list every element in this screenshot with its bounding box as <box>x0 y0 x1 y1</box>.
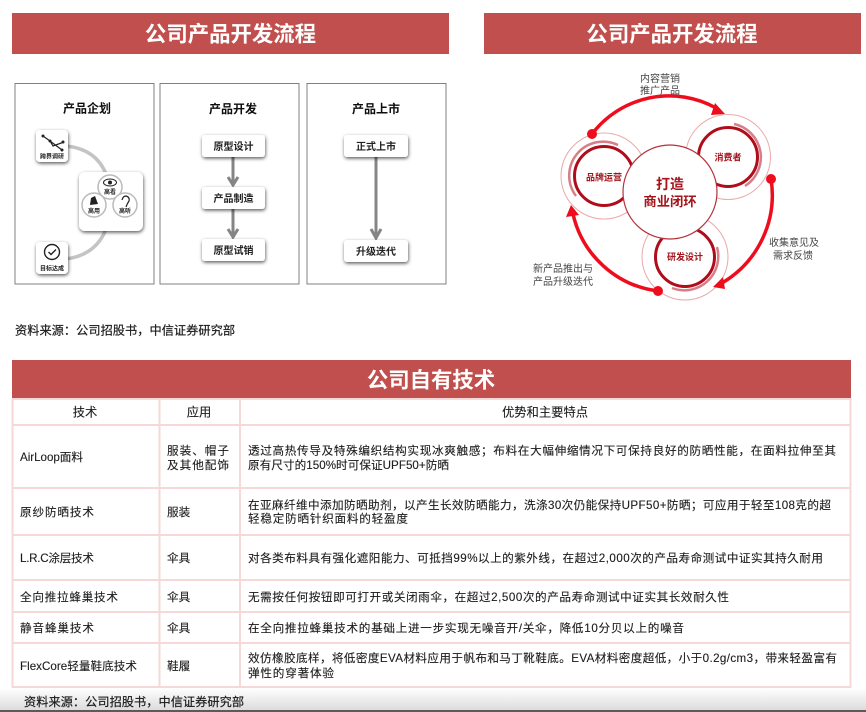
row: 原纱防晒技术: 轻稳定防晒针织面料的轻盈度 <box>248 512 408 526</box>
row: 原纱防晒技术: 在亚麻纤维中添加防晒助剂，以产生长效防晒能力，洗涤30次仍能保持UPF50+防晒；可应用于轻至108克的超 <box>248 498 831 512</box>
node: 品牌运营 <box>561 133 647 219</box>
label: 新产品推出: 新产品推出与 <box>533 262 593 275</box>
node: 研发设计: 研发设计 <box>667 251 703 262</box>
box: 正式上市 <box>344 135 408 157</box>
arrow: 制造到试销 <box>228 209 238 237</box>
icon: eye: 高看 <box>104 188 116 196</box>
box: 原型设计 <box>202 135 265 157</box>
source note: bottom: 资料来源：公司招股书，中信证券研究部 <box>24 694 244 709</box>
table header row <box>73 404 588 420</box>
panel title: 产品上市: 产品上市 <box>352 101 400 116</box>
row: 全向推拉蜂巢技术: 伞具 <box>167 590 191 604</box>
source note: top: 资料来源：公司招股书，中信证券研究部 <box>15 322 235 338</box>
label: 收集意见: 收集意见及 <box>769 236 819 249</box>
row: L.R.C涂层技术: L.R.C涂层技术 <box>20 551 94 565</box>
arrow: 研发设计到品牌运营 <box>566 205 663 296</box>
label: 内容营销: 内容营销 <box>640 72 680 85</box>
node: 消费者 <box>686 114 770 200</box>
box: 跨界调研 <box>36 130 68 162</box>
box: 原型试销: 原型试销 <box>214 244 254 257</box>
row: 全向推拉蜂巢技术 <box>20 590 729 604</box>
label: 内容营销: 推广产品 <box>640 84 680 97</box>
label: 收集意见: 需求反馈 <box>773 249 813 262</box>
node: 消费者: 消费者 <box>714 152 742 162</box>
row: L.R.C涂层技术 <box>20 551 823 565</box>
row: 原纱防晒技术: 服装 <box>167 506 191 519</box>
row: 静音蜂巢技术: 伞具 <box>167 621 191 635</box>
row: AirLoop面料: 服装、帽子 <box>167 444 229 458</box>
panel title: 产品企划: 产品企划 <box>63 100 111 116</box>
panel title: 产品开发: 产品开发 <box>209 101 257 116</box>
arrow: 上市到迭代 <box>371 157 381 238</box>
row: 原纱防晒技术 <box>20 498 831 526</box>
panel: 产品上市 <box>307 84 446 284</box>
center circle: 打造 <box>656 176 684 192</box>
icon: hand: 高用 <box>88 207 100 215</box>
box: 原型设计: 原型设计 <box>214 140 254 153</box>
node: 研发设计 <box>642 214 728 300</box>
arrow: 品牌运营到消费者 <box>587 96 725 139</box>
row: FlexCore轻量鞋底技术: 鞋履 <box>167 659 191 673</box>
center circle <box>623 145 717 239</box>
label: 收集意见 <box>769 236 819 262</box>
row: AirLoop面料: 原有尺寸的150%时可保证UPF50+防晒 <box>248 458 449 472</box>
label: 新产品推出: 产品升级迭代 <box>533 275 593 288</box>
panel: 产品企划 <box>15 84 154 284</box>
arrow: 设计到制造 <box>228 157 238 185</box>
node: 品牌运营: 品牌运营 <box>586 172 622 182</box>
heading: right banner: 公司产品开发流程 <box>586 22 758 46</box>
label: 新产品推出 <box>533 262 593 288</box>
icon: ear: 高听 <box>119 207 131 215</box>
row: 静音蜂巢技术: 在全向推拉蜂巢技术的基础上进一步实现无噪音开/关伞，降低10分贝以上的噪音 <box>248 621 684 635</box>
row: AirLoop面料: AirLoop面料 <box>20 450 83 464</box>
row: 全向推拉蜂巢技术: 全向推拉蜂巢技术 <box>20 590 118 604</box>
row: 全向推拉蜂巢技术: 无需按任何按钮即可打开或关闭雨伞，在超过2,500次的产品寿命测试中证实其长效耐久性 <box>248 590 729 604</box>
arrow: 消费者到研发设计 <box>713 174 776 289</box>
table header row: 优势和主要特点 <box>502 404 588 420</box>
box: 产品制造 <box>202 187 265 209</box>
row: FlexCore轻量鞋底技术: 效仿橡胶底样，将低密度EVA材料应用于帆布和马丁靴鞋底。EVA材料密度超低，小于0.2g/cm3，带来轻盈富有 <box>248 651 837 665</box>
box: 升级迭代 <box>344 240 408 262</box>
table header row: 应用 <box>187 404 211 420</box>
row: 原纱防晒技术: 原纱防晒技术 <box>20 505 94 519</box>
heading: left banner <box>12 13 449 54</box>
chart: circular business loop <box>533 72 819 300</box>
row: AirLoop面料 <box>20 444 836 472</box>
panel: 产品开发 <box>160 84 299 284</box>
table header row: 技术 <box>73 406 97 420</box>
connecting arcs <box>66 146 106 259</box>
row: FlexCore轻量鞋底技术: 弹性的穿著体验 <box>248 666 334 680</box>
row: FlexCore轻量鞋底技术 <box>20 651 837 680</box>
row: FlexCore轻量鞋底技术: FlexCore轻量鞋底技术 <box>20 659 137 673</box>
row: 静音蜂巢技术 <box>20 621 684 635</box>
heading: left banner: 公司产品开发流程 <box>145 22 316 46</box>
heading: table banner <box>12 360 851 399</box>
row: 静音蜂巢技术: 静音蜂巢技术 <box>20 621 94 635</box>
box: central trio <box>79 172 143 231</box>
center circle: 商业闭环 <box>643 193 697 209</box>
bottom gray band <box>0 688 866 712</box>
row: AirLoop面料: 及其他配饰 <box>167 458 229 472</box>
table: 公司自有技术 <box>12 360 851 687</box>
box: 升级迭代: 升级迭代 <box>356 245 396 258</box>
box: 跨界调研: 跨界调研 <box>40 152 64 160</box>
box: 目标达成 <box>36 242 68 274</box>
box: 产品制造: 产品制造 <box>214 192 254 205</box>
box: 正式上市: 正式上市 <box>356 140 396 153</box>
row: L.R.C涂层技术: 对各类布料具有强化遮阳能力、可抵挡99%以上的紫外线，在超过2,000次的产品寿命测试中证实其持久耐用 <box>248 551 823 565</box>
box: 原型试销 <box>202 239 265 261</box>
label: 内容营销 <box>640 72 680 97</box>
box: 目标达成: 目标达成 <box>40 264 64 272</box>
row: L.R.C涂层技术: 伞具 <box>167 551 191 565</box>
heading: right banner <box>484 13 861 54</box>
row: AirLoop面料: 透过高热传导及特殊编织结构实现冰爽触感；布料在大幅伸缩情况下可保持良好的防晒性能，在面料拉伸至其 <box>248 444 836 458</box>
heading: table banner: 公司自有技术 <box>367 368 495 392</box>
